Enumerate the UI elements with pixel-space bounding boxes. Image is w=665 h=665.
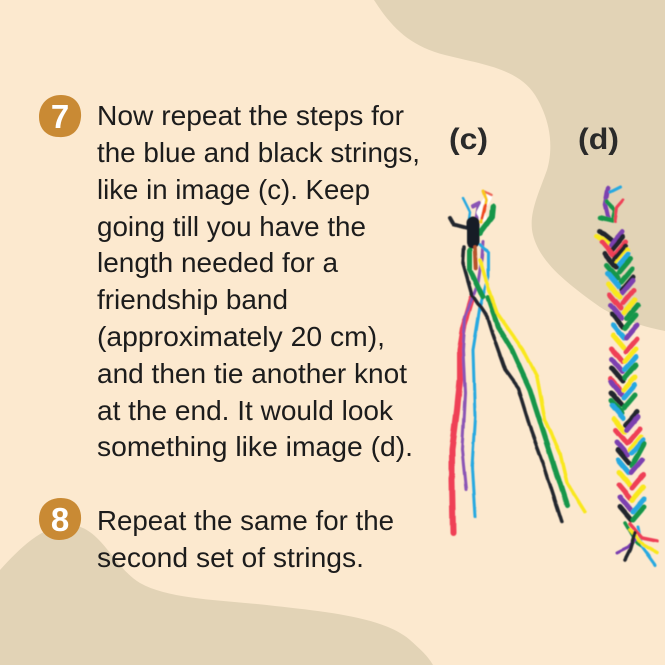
braid end strands — [617, 523, 657, 565]
step 7 badge — [39, 95, 81, 137]
step 7 text block: going till you have the — [97, 211, 366, 242]
label (c): (c) — [449, 123, 488, 156]
background blob: top right — [374, 0, 665, 331]
image (c): loose strings with knot — [450, 191, 585, 533]
step 7 text block: something like image (d). — [97, 431, 413, 462]
image (d): finished braided band — [597, 187, 657, 565]
step 7 text block: Now repeat the steps for — [97, 100, 404, 131]
step 8 text block: second set of strings. — [97, 542, 364, 573]
step 8 text block — [97, 505, 394, 573]
step 7 text block: (approximately 20 cm), — [97, 321, 385, 352]
braid chevrons — [597, 231, 644, 520]
step 7 text block: and then tie another knot — [97, 358, 407, 389]
background blob: bottom left — [0, 525, 433, 665]
step 7 text block: like in image (c). Keep — [97, 174, 370, 205]
step 7 text block: friendship band — [97, 284, 288, 315]
step 8 text block: Repeat the same for the — [97, 505, 394, 536]
step 8 badge — [39, 498, 81, 540]
label (d): (d) — [578, 123, 619, 156]
step 7 badge: 7 — [51, 98, 69, 135]
step 7 text block: length needed for a — [97, 247, 339, 278]
step 7 text block: at the end. It would look — [97, 395, 393, 426]
step 7 text block — [97, 100, 420, 462]
braid top strands — [600, 187, 623, 222]
step 8 badge: 8 — [51, 501, 69, 538]
step 7 text block: the blue and black strings, — [97, 137, 420, 168]
